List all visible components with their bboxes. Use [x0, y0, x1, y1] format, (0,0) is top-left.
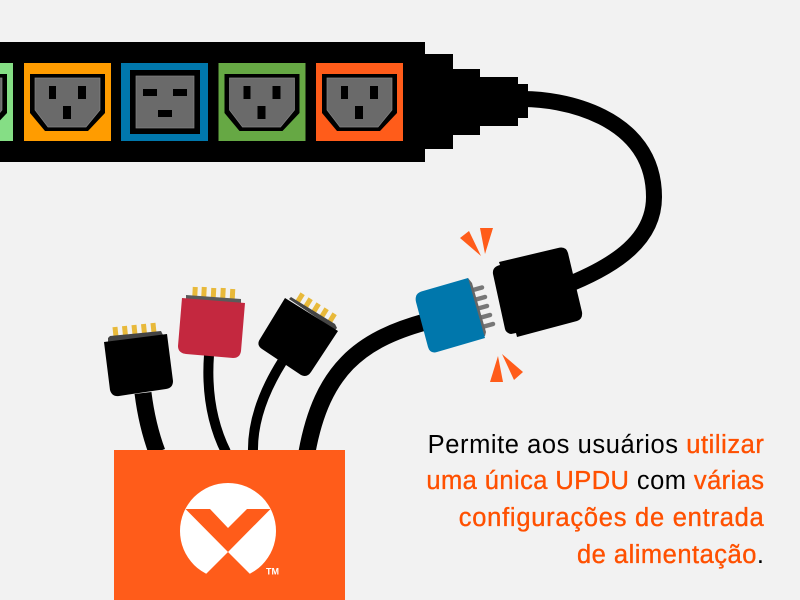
- plug cables: [143, 355, 282, 452]
- power strip: [0, 42, 528, 162]
- description text: uma única UPDU com várias: [426, 467, 764, 495]
- trademark: TM: [266, 566, 279, 576]
- pin base: [466, 278, 486, 336]
- socket: blue: [121, 63, 208, 141]
- logo: [180, 483, 279, 587]
- description text: de alimentação.: [577, 541, 764, 569]
- description text: configurações de entrada: [459, 504, 765, 532]
- orange box: [114, 450, 345, 600]
- blue connector: [416, 278, 493, 352]
- main power cable: [520, 99, 654, 283]
- plug: red: [178, 287, 245, 358]
- description text: [426, 431, 765, 569]
- blue connector cable: [307, 322, 425, 452]
- plug: black left: [104, 323, 173, 396]
- socket: green: [218, 63, 306, 141]
- black connector: [493, 248, 582, 337]
- plug: black right: [258, 292, 338, 376]
- socket: orange: [24, 63, 111, 141]
- spark marks: [460, 228, 523, 382]
- description text: Permite aos usuários utilizar: [428, 431, 764, 459]
- socket: red-orange: [316, 63, 403, 141]
- body: [416, 278, 485, 352]
- pins: [473, 288, 493, 326]
- strip body: [0, 42, 528, 162]
- socket: light green: [0, 63, 13, 141]
